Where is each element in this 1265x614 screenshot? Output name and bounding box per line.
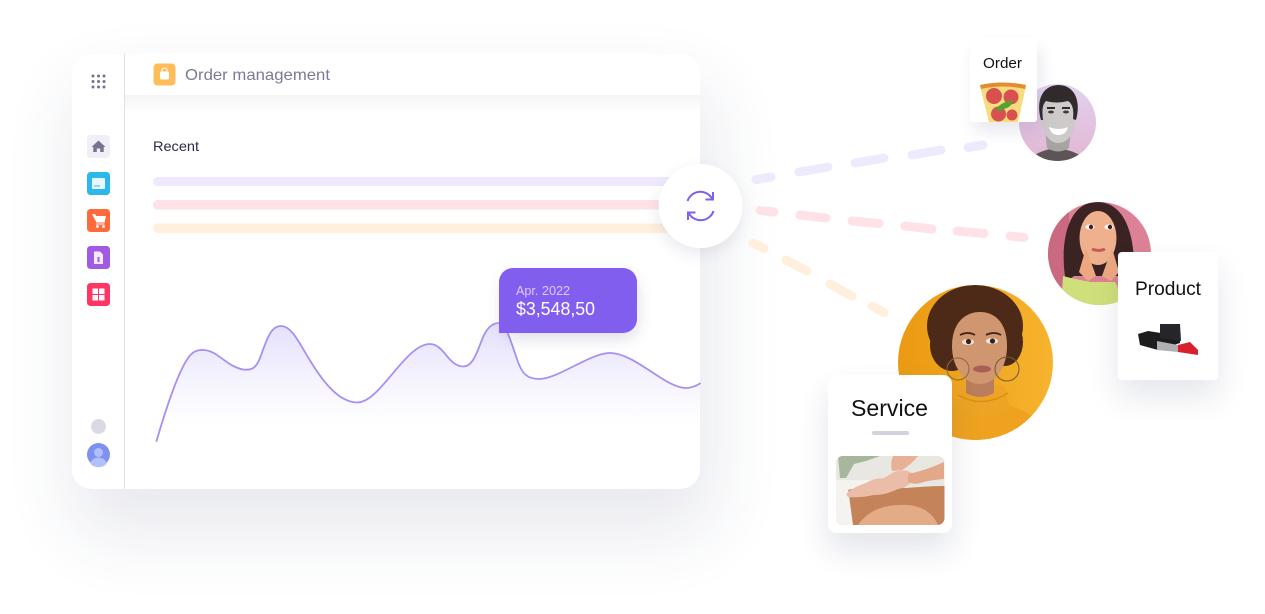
heading: recent: Recent (153, 138, 199, 154)
service divider (872, 431, 909, 435)
icon: invoice (87, 246, 110, 269)
bar: purple (153, 177, 683, 186)
icon: card (87, 172, 110, 195)
icon: cart (87, 209, 110, 232)
avatar: woman with pink background (1048, 202, 1151, 305)
avatar: man (1019, 84, 1096, 161)
bar: orange (153, 224, 683, 233)
icon: home (87, 135, 110, 158)
icon: sync arrows (688, 192, 714, 220)
icon: status dot (91, 419, 106, 434)
sidebar divider (124, 54, 125, 489)
icon: pizza slice (980, 82, 1026, 122)
dashed line: orange to service (753, 243, 884, 312)
icon: user avatar (87, 443, 110, 467)
sync button (658, 164, 742, 254)
panel: dashboard card (72, 54, 700, 489)
avatar: woman with orange background (895, 282, 1057, 445)
dashed line: purple to order (756, 145, 983, 180)
bar: pink (153, 200, 683, 210)
icon: order bag (154, 64, 176, 86)
icon: lipstick (1138, 324, 1198, 355)
heading: order management: Order management (185, 67, 331, 84)
card: product (1118, 252, 1218, 396)
card: service (828, 375, 952, 550)
icon: tiles (87, 283, 110, 306)
card: service: Service (851, 395, 928, 421)
icon: app grid (92, 74, 106, 88)
header shadow (125, 95, 700, 115)
tooltip (499, 268, 637, 338)
card: order: Order (983, 56, 1022, 72)
tooltip: $3,548,50 (516, 299, 595, 319)
photo: massage (836, 456, 945, 525)
background shadow: dashboard (72, 85, 714, 535)
card: order (973, 50, 1044, 134)
tooltip: Apr. 2022 (516, 283, 570, 298)
card: product: Product (1135, 279, 1202, 300)
dashed line: pink to product (760, 210, 1024, 238)
line chart (156, 323, 700, 441)
